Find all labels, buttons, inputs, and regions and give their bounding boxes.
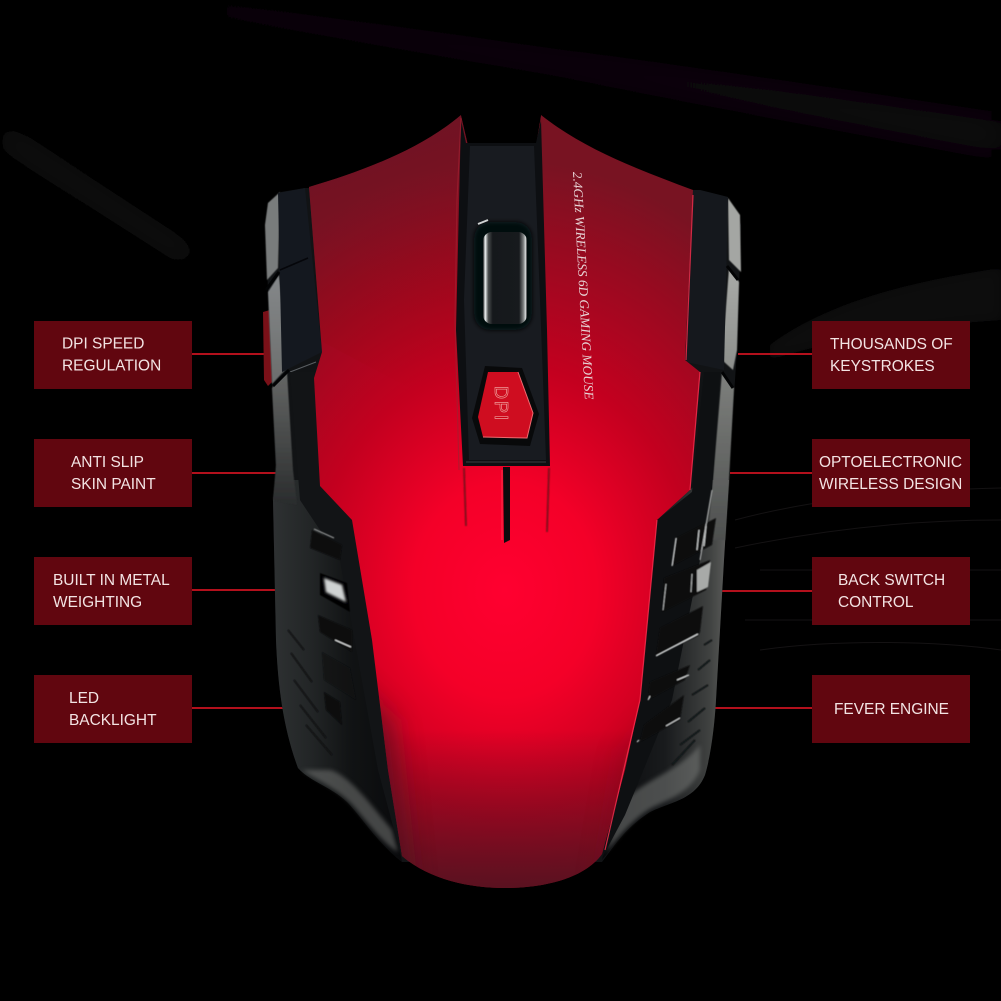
label: thousands of keystrokes: KEYSTROKES [830,358,935,375]
label: LED backlight: LED [69,690,99,707]
left upper black button [278,188,322,372]
connector lines [192,354,812,708]
icon: DPI side button [263,310,274,386]
label: back switch control [812,557,970,625]
label: LED backlight: BACKLIGHT [69,712,157,729]
left tail highlight [302,770,398,852]
left grey stripe [265,192,297,505]
label: built in metal weighting: BUILT IN METAL [53,572,170,589]
label: LED backlight [34,675,192,743]
DPI label: DPI [491,386,511,422]
label: optoelectronic wireless design: OPTOELECTRONIC [819,454,962,471]
label: optoelectronic wireless design: WIRELESS DESIGN [819,476,962,493]
right side black gradient [602,480,729,860]
label: optoelectronic wireless design [812,439,970,507]
lower strip edge shadows [464,468,549,532]
label: back switch control: BACK SWITCH [838,572,945,589]
label: DPI speed regulation: REGULATION [62,358,161,374]
red edge highlights [605,195,700,850]
label: anti slip skin paint: SKIN PAINT [71,476,156,493]
left side vents [288,529,356,755]
label: built in metal weighting [34,557,192,625]
left lower black strip [290,372,402,860]
center slit [503,467,510,543]
model text: 2.4GHz WIRELESS 6D GAMING MOUSE [570,171,597,400]
label: back switch control: CONTROL [838,594,914,611]
mouse body black base [265,188,741,862]
label: DPI speed regulation [34,321,192,389]
label: built in metal weighting: WEIGHTING [53,594,142,611]
scroll wheel [474,220,532,330]
label: anti slip skin paint [34,439,192,507]
right upper black button [686,190,728,370]
label: thousands of keystrokes [812,321,970,389]
DPI button [472,366,539,446]
red shell [300,100,710,900]
right side vents [637,490,716,765]
center black strip [455,118,550,543]
label: anti slip skin paint: ANTI SLIP [71,454,144,471]
center panel gap (top notch) [461,100,541,145]
right grey stripe [708,198,741,540]
label: fever engine [812,675,970,743]
left side black gradient [273,480,402,862]
label: fever engine: FEVER ENGINE [834,701,949,718]
label: DPI speed regulation: DPI SPEED [62,336,144,352]
mouse [263,100,741,900]
label: thousands of keystrokes: THOUSANDS OF [830,336,953,353]
right tail highlight [606,745,700,852]
right lower black strip [602,372,720,858]
